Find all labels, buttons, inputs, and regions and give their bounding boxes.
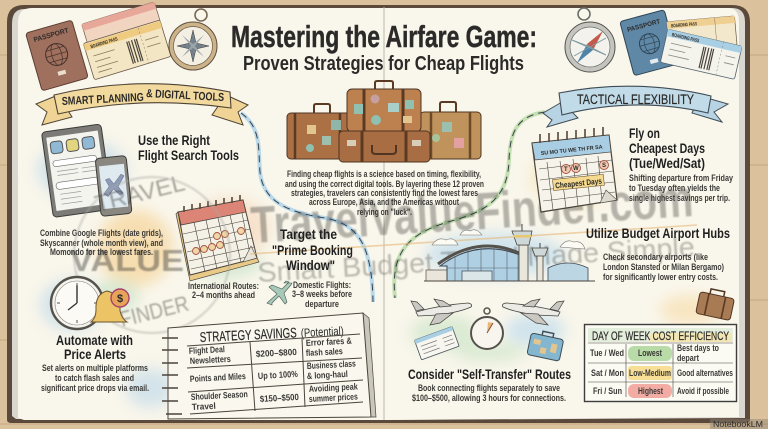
icon: boarding passes blue: BOARDING PASS: [671, 32, 700, 44]
text: central introduction: strategies, travelers can consistently find the lowest fares: [291, 188, 478, 198]
panel: strategy savings notebook: [162, 313, 376, 419]
left plane: [411, 299, 472, 325]
left suitcase: [287, 104, 353, 159]
icon: two airplanes, stopwatch, ticket and luggage: [411, 299, 565, 361]
tablet: [41, 124, 113, 217]
savings rows: & long-haul: [307, 369, 348, 381]
heading: utilize budget airport hubs: Utilize Budget Airport Hubs: [586, 225, 730, 241]
heading: use the right flight search tools: [138, 132, 239, 163]
savings rows: Flight Deal: [189, 344, 225, 356]
text: international routes: 2–4 months ahead: [192, 290, 255, 300]
icon: boarding passes blue: BOARDING PASS: [671, 21, 698, 29]
main terminal: [440, 249, 527, 281]
right ribbon banner: [543, 86, 728, 127]
left ribbon banner: [36, 84, 248, 125]
heading: fly on cheapest days: (Tue/Wed/Sat): [629, 155, 705, 171]
text: price alerts description: [41, 363, 149, 393]
heading: use the right flight search tools: Use the Right: [138, 132, 210, 148]
icon: brown briefcase: [696, 287, 736, 320]
icon: cheapest days calendar: SU MO TU WE TH FR SA: [541, 145, 603, 157]
savings rows: flash sales: [306, 346, 343, 358]
text: combine search engines: Combine Google Flights (date grids),: [40, 228, 163, 238]
text: fly on cheapest days description: single highest savings per trip.: [629, 193, 730, 203]
text: central introduction: relying on "luck".: [357, 207, 412, 217]
icon: silver compass: [565, 8, 615, 72]
bottom suitcase: [339, 131, 430, 162]
text: fly on cheapest days description: Shifting departure from Friday: [629, 173, 733, 183]
text: airport hubs description: for significantly lower entry costs.: [603, 272, 718, 282]
icon: blue passport: PASSPORT: [626, 18, 661, 34]
icon: cheapest days calendar: T: [564, 167, 568, 173]
heading: fly on cheapest days: Fly on: [629, 125, 660, 141]
icon: boarding passes beige: [78, 2, 171, 80]
right ribbon banner: TACTICAL FLEXIBILITY: [577, 92, 694, 107]
text: international routes: International Routes:: [188, 281, 259, 291]
row: tue wed: depart: [677, 353, 699, 363]
savings rows: Business class: [307, 358, 356, 371]
text: combine search engines: Skyscanner (whole month view), and: [40, 238, 163, 248]
watermark: travel value finder seal: TRAVEL: [92, 169, 188, 217]
text: self-transfer description: $100–$500, allowing 3 hours for connections.: [412, 393, 566, 403]
text: central introduction: and using the correct digital tools. By layering these 12 proven: [285, 179, 484, 189]
icon: clock and alert bell: [51, 277, 129, 329]
text: domestic flights: departure: [305, 299, 339, 309]
icon: gold compass: [169, 9, 217, 70]
savings rows: $150–$500: [260, 392, 299, 404]
text: combine search engines: Momondo for the lowest fares.: [50, 247, 153, 257]
icon: airplane: [267, 281, 292, 305]
left ribbon banner: SMART PLANNING: [62, 92, 144, 108]
text: airport hubs description: London Stansted or Milan Bergamo): [603, 262, 724, 272]
row: sat mon: [591, 366, 733, 380]
watermark: travel value finder seal: [70, 169, 230, 333]
title: [231, 19, 537, 75]
icon: tablet and phone: [41, 124, 132, 217]
notebook title: STRATEGY SAVINGS: [199, 324, 297, 345]
left annex: [426, 270, 462, 281]
dashed path: left blue route: [241, 113, 373, 302]
text: price alerts description: to catch flash sales and: [55, 373, 134, 383]
phone: [95, 155, 132, 216]
text: international routes: [188, 281, 259, 300]
text: price alerts description: significant price drops via email.: [41, 383, 149, 393]
right suitcase: [420, 102, 481, 159]
stopwatch: [471, 308, 503, 349]
icon: stacked suitcases: [287, 81, 481, 162]
title: Proven Strategies for Cheap Flights: [243, 53, 524, 75]
icon: red passport: [26, 20, 88, 91]
heading: target the prime booking window: "Prime Booking: [272, 242, 353, 258]
heading: target the prime booking window: Window": [286, 257, 335, 273]
row: tue wed: Lowest: [638, 348, 662, 358]
dashed path: right green route: [394, 112, 545, 298]
control tower: [512, 224, 532, 281]
notebook title: (Potential): [300, 324, 344, 340]
blue luggage: [527, 329, 565, 361]
heading: target the prime booking window: Target the: [280, 226, 337, 242]
bell: [91, 291, 127, 322]
watercolor washes: [37, 140, 720, 408]
text: airport hubs description: Check secondary airports (like: [603, 252, 708, 262]
row: sat mon: Low-Medium: [629, 368, 671, 378]
illustration: airport terminal: [424, 224, 595, 281]
row: tue wed: Best days to: [677, 343, 719, 353]
row: sat mon: Sat / Mon: [591, 368, 624, 378]
icon: boarding passes beige: BOARDING PASS: [90, 36, 119, 50]
icon: cheapest days calendar: W: [573, 166, 579, 172]
heading: fly on cheapest days: [629, 125, 705, 171]
left ribbon banner: & DIGITAL TOOLS: [146, 88, 225, 104]
row: fri sun: Highest: [638, 386, 663, 396]
watermark: travel value finder seal: VALUE: [70, 243, 184, 278]
top suitcase: [347, 81, 421, 132]
text: domestic flights: [292, 280, 352, 309]
heading: automate with price alerts: Price Alerts: [64, 346, 126, 362]
savings rows: Travel: [192, 401, 216, 412]
savings rows: Shoulder Season: [191, 389, 248, 402]
heading: automate with price alerts: Automate with: [56, 332, 133, 348]
icon: blue passport: [620, 10, 679, 76]
row: tue wed: [590, 343, 719, 363]
savings rows: [189, 336, 359, 412]
savings rows: summer prices: [309, 391, 358, 404]
right plane: [502, 299, 564, 325]
row: fri sun: Fri / Sun: [593, 386, 622, 396]
heading: use the right flight search tools: Flight Search Tools: [138, 147, 239, 163]
savings rows: $200–$800: [256, 347, 297, 359]
icon: red passport: PASSPORT: [33, 27, 70, 44]
watermark: orange underline: [250, 225, 697, 254]
icon: boarding passes blue: [660, 16, 742, 79]
text: price alerts description: Set alerts on multiple platforms: [42, 363, 148, 373]
savings rows: Points and Miles: [190, 371, 246, 384]
text: fly on cheapest days description: [629, 173, 733, 203]
heading: consider self-transfer routes: Consider "Self-Transfer" Routes: [408, 366, 571, 382]
row: fri sun: Avoid if possible: [677, 386, 729, 396]
clock: [51, 277, 103, 329]
text: central introduction: across Europe, Asia, and the Americas without: [309, 197, 459, 207]
savings rows: Avoiding peak: [309, 381, 359, 394]
row: tue wed: Tue / Wed: [590, 348, 624, 358]
heading: automate with price alerts: [56, 332, 133, 362]
text: combine search engines: [40, 228, 163, 257]
watermark: tagline: Smart Budget Travel Made Simple: [257, 231, 696, 288]
text: fly on cheapest days description: to Tuesday often yields the: [629, 183, 720, 193]
icon: cheapest days calendar: [532, 127, 617, 212]
text: airport hubs description: [603, 252, 724, 282]
watermark: travel value finder seal: FINDER: [117, 291, 191, 332]
notebooklm badge: NotebookLM: [713, 419, 763, 429]
small tower: [532, 243, 548, 281]
coin: $: [117, 293, 123, 305]
text: central introduction: Finding cheap flights is a science based on timing, flexibility,: [287, 169, 481, 179]
text: domestic flights: 3–8 weeks before: [292, 289, 352, 299]
right hall: [548, 263, 588, 281]
heading: fly on cheapest days: Cheapest Days: [629, 140, 705, 156]
text: domestic flights: Domestic Flights:: [293, 280, 351, 290]
savings rows: Newsletters: [190, 354, 231, 366]
ticket: [414, 326, 459, 360]
icon: booking calendar: [176, 195, 259, 281]
row: sat mon: Good alternatives: [677, 368, 733, 378]
row: fri sun: [593, 384, 729, 398]
text: self-transfer description: [412, 383, 566, 403]
icon: cheapest days calendar: S: [602, 163, 606, 169]
panel: day of week cost efficiency table: [584, 324, 736, 402]
icon: cheapest days calendar: Cheapest Days: [555, 176, 603, 190]
savings rows: Error fares &: [306, 336, 352, 348]
text: self-transfer description: Book connecting flights separately to save: [418, 383, 560, 393]
heading: target the prime booking window: [272, 226, 353, 273]
text: central introduction: [285, 169, 484, 217]
savings rows: Up to 100%: [258, 369, 298, 381]
title: Mastering the Airfare Game:: [231, 19, 537, 54]
